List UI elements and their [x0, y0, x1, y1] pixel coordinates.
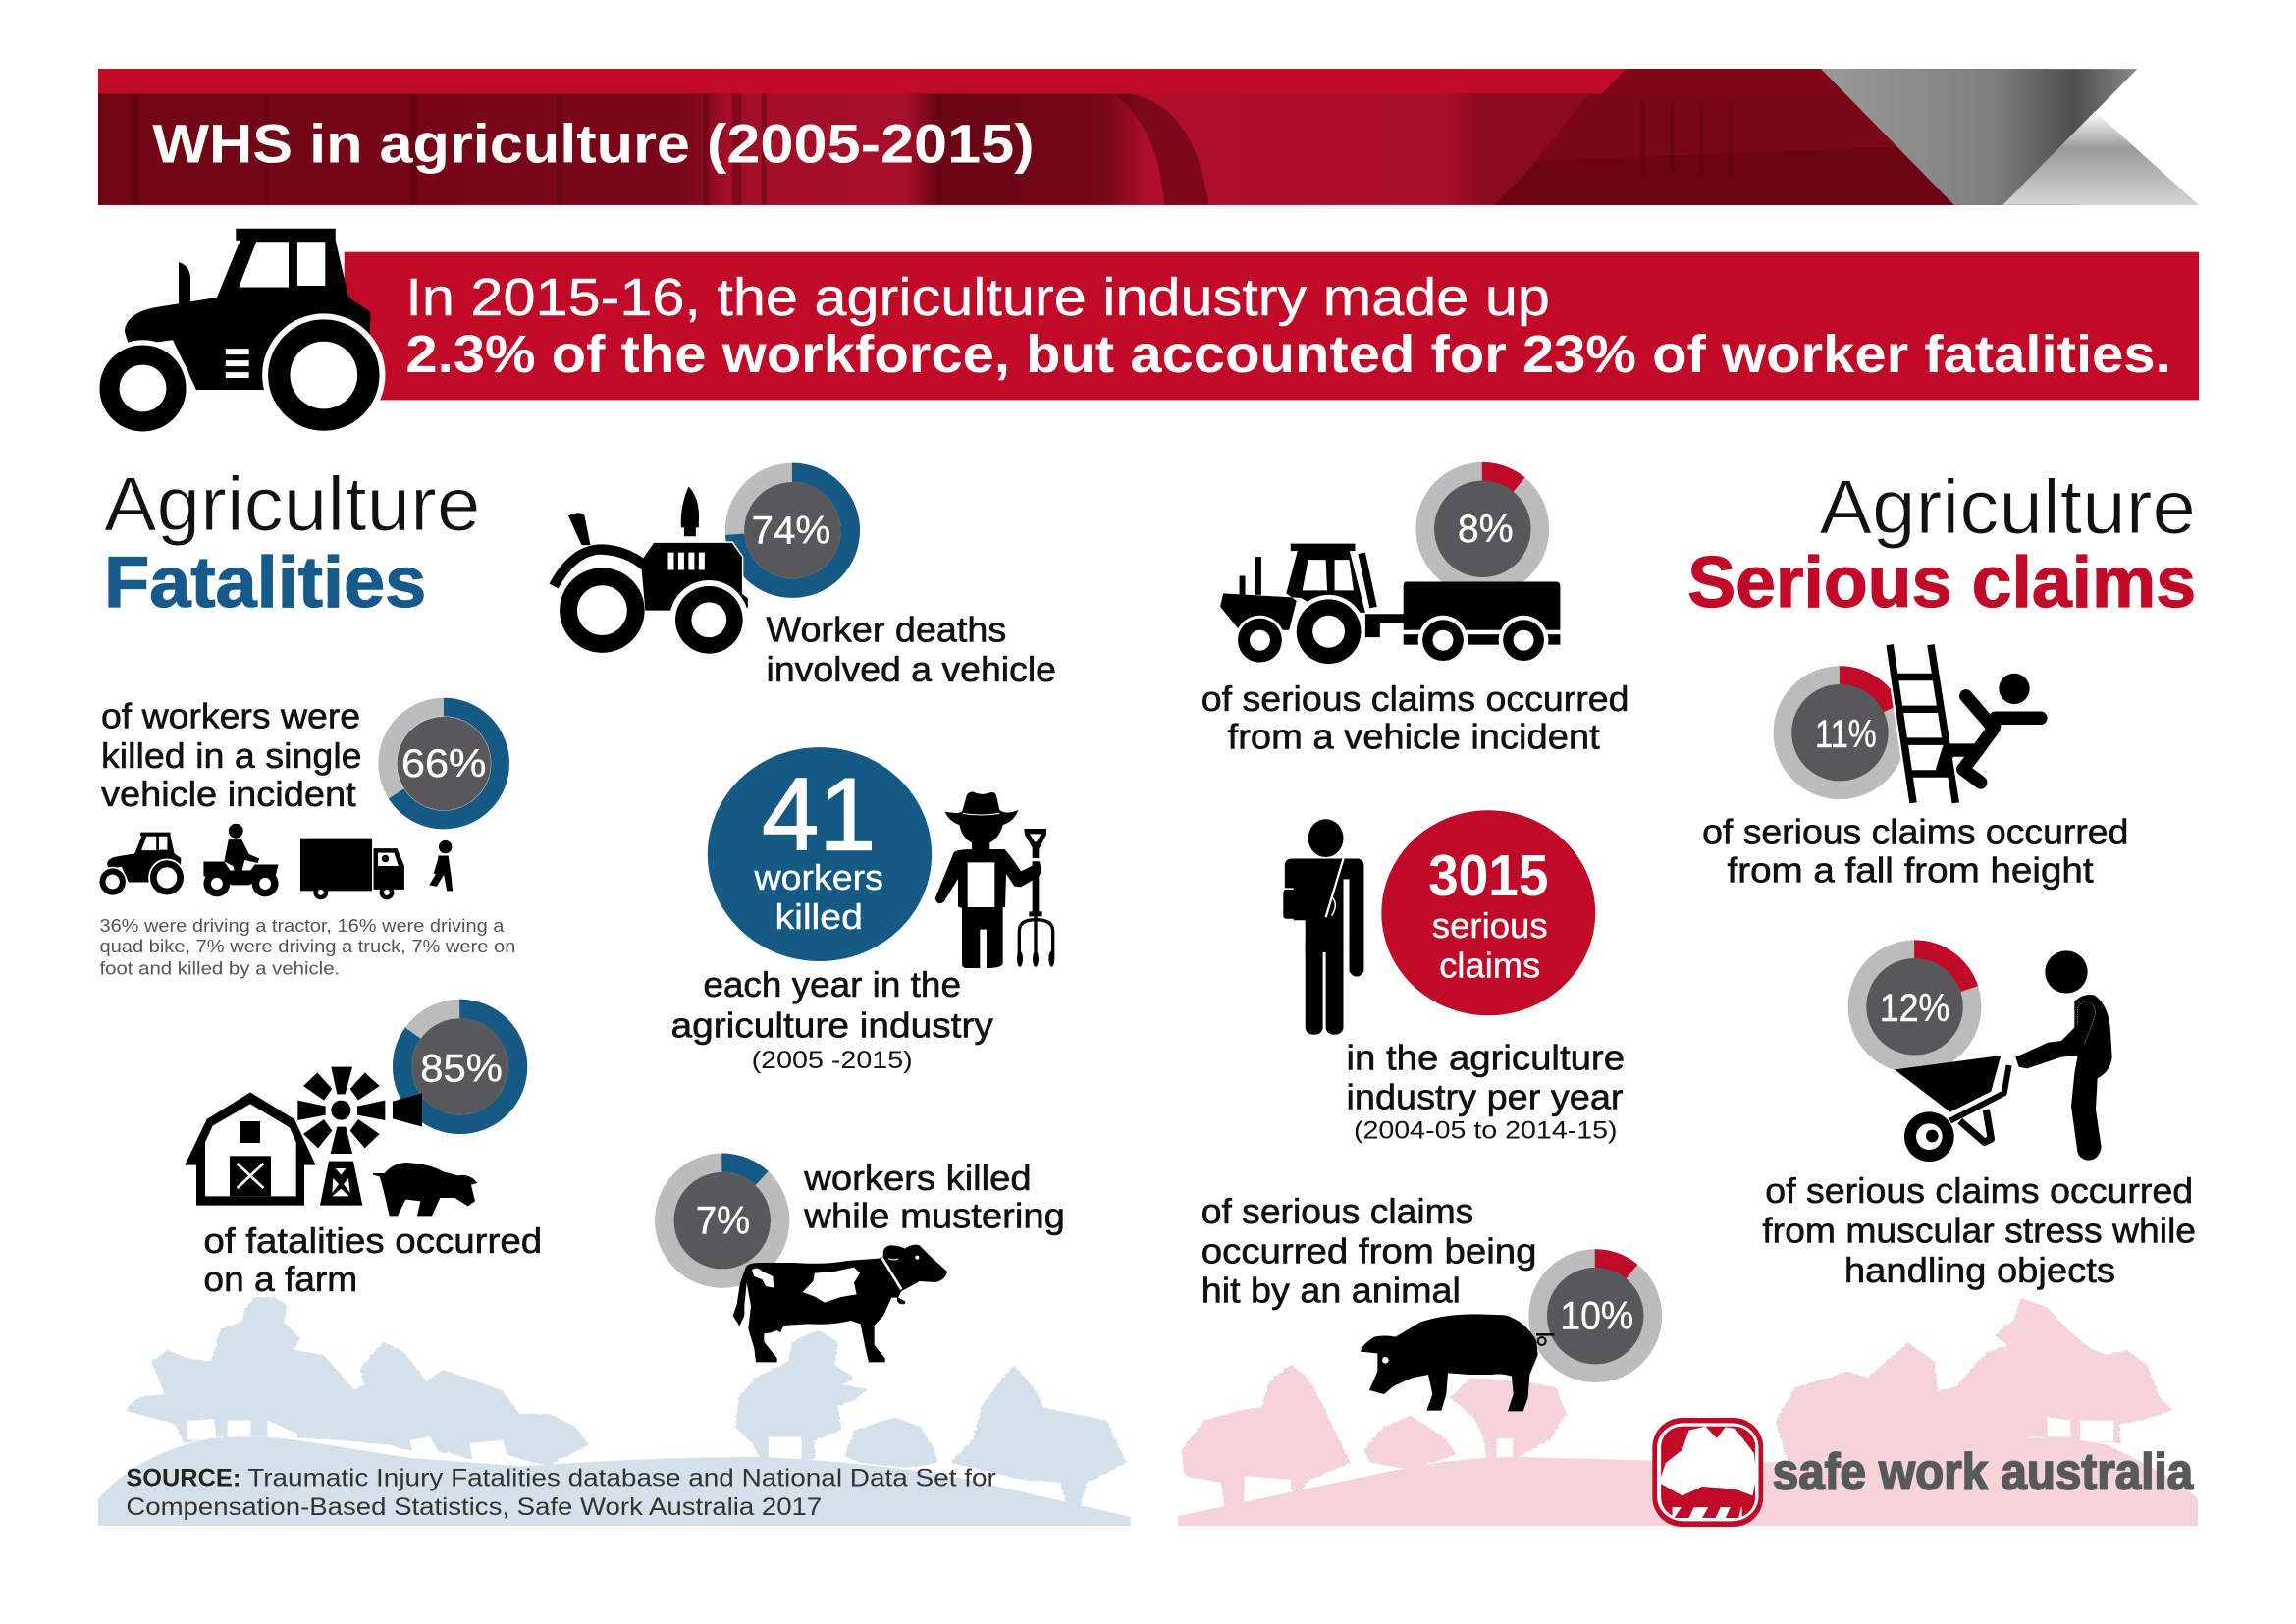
- text: single vehicle: [101, 697, 362, 814]
- source note: [126, 1464, 996, 1521]
- text: in the agriculture: (2004-05 to 2014-15): [1354, 1118, 1618, 1145]
- text: muscular stress: [1762, 1171, 2196, 1290]
- heading: agriculture: Agriculture: [1820, 465, 2196, 550]
- logo wordmark: safe work australia: [1773, 1443, 2194, 1500]
- stat: 66 percent: 66%: [401, 741, 486, 785]
- title: WHS in agriculture (2005-2015): [152, 114, 1035, 175]
- text: fall from height: [1702, 813, 2128, 890]
- text: hit by animal: hit by an animal: [1201, 1272, 1461, 1311]
- panel: agriculture fatalities: [98, 462, 2198, 1527]
- stat: 3015 serious claims: 3015: [1428, 842, 1548, 908]
- icon: cow: [733, 1245, 947, 1362]
- text: in the agriculture: industry per year: [1346, 1078, 1624, 1117]
- text: muscular stress: of serious claims occurred: [1765, 1171, 2193, 1211]
- source note: Compensation-Based Statistics, Safe Work Australia 2017: [126, 1493, 822, 1521]
- stat: 41 workers killed: workers: [754, 858, 883, 897]
- icon: pig: [1361, 1314, 1554, 1411]
- text: on a farm: of fatalities occurred: [203, 1221, 542, 1261]
- stat: 74 percent: [554, 472, 1056, 689]
- text: single vehicle: vehicle incident: [101, 775, 356, 814]
- key statistic banner: [345, 252, 2199, 400]
- stat: 3015 serious claims: [1283, 810, 1625, 1145]
- text: single vehicle: killed in a single: [101, 736, 362, 776]
- text: mustering: while mustering: [803, 1197, 1065, 1236]
- text: vehicle breakdown note: [99, 915, 515, 978]
- stat: 66 percent: [101, 697, 501, 820]
- stat: 11 percent fall: 11%: [1815, 712, 1877, 756]
- icon: quad bike: [203, 824, 279, 896]
- icon: person walking: [429, 840, 453, 891]
- icon: injured worker: [1283, 819, 1363, 1035]
- stat: 10 percent animal: 10%: [1560, 1294, 1633, 1338]
- stat: 12 percent muscular stress: [1762, 949, 2196, 1290]
- text: hit by animal: occurred from being: [1201, 1231, 1537, 1271]
- icon: worker with wheelbarrow: [1895, 950, 2112, 1162]
- stat: 8 percent: [1201, 472, 1629, 757]
- stat: 7 percent mustering: 7%: [696, 1199, 750, 1243]
- stat: 3015 serious claims: claims: [1439, 946, 1540, 985]
- text: vehicle incident: of serious claims occurred: [1201, 679, 1629, 719]
- header banner: [98, 68, 2202, 206]
- key statistic line 2: 2.3% of the workforce, but accounted for 23% of worker fatalities.: [405, 325, 2171, 384]
- icon: tractor and trailer: [1220, 544, 1560, 669]
- stat: 41 workers killed: killed: [774, 897, 863, 937]
- text: on a farm: on a farm: [203, 1260, 357, 1299]
- stat: 12 percent muscular stress: 12%: [1880, 986, 1949, 1030]
- text: in the agriculture: [1346, 1038, 1625, 1145]
- text: each year: [671, 965, 993, 1074]
- logo: safe work australia: [1652, 1418, 2194, 1527]
- text: each year: agriculture industry: [671, 1006, 993, 1046]
- text: hit by animal: [1201, 1192, 1537, 1311]
- source note: Traumatic Injury Fatalities database and National Data Set for: [247, 1464, 996, 1491]
- heading: serious claims: Serious claims: [1687, 543, 2196, 623]
- text: worker deaths: [767, 611, 1056, 689]
- text: vehicle incident: [1201, 679, 1629, 757]
- background: pink trees and hill: [1178, 1298, 2198, 1526]
- text: vehicle breakdown note: foot and killed by a vehicle.: [99, 957, 340, 978]
- stat: 85 percent: 85%: [420, 1046, 503, 1090]
- icon: truck: [300, 839, 404, 899]
- stat: 7 percent mustering: [665, 1159, 1065, 1362]
- icon: ladder fall: [1890, 645, 2041, 803]
- source note: SOURCE:: [126, 1464, 240, 1491]
- background: blue trees and hill: [98, 1297, 1131, 1526]
- icon: hero tractor: [94, 229, 385, 437]
- text: worker deaths: Worker deaths: [767, 611, 1006, 650]
- stat: 41 workers killed: [671, 747, 993, 1074]
- text: hit by animal: of serious claims: [1201, 1192, 1473, 1231]
- text: on a farm: [203, 1221, 542, 1299]
- icon: mini tractor: [98, 833, 186, 896]
- text: vehicle breakdown note: 36% were driving a tractor, 16% were driving a: [99, 915, 505, 936]
- stat: 10 percent animal: [1201, 1192, 1652, 1411]
- heading: agriculture: Agriculture: [104, 462, 480, 547]
- text: in the agriculture: in the agriculture: [1346, 1038, 1625, 1077]
- text: mustering: [803, 1159, 1065, 1236]
- key statistic line 1: In 2015-16, the agriculture industry made up: [405, 268, 1550, 327]
- stat: 74 percent: 74%: [752, 509, 830, 553]
- text: vehicle incident: from a vehicle incident: [1228, 718, 1600, 757]
- icon: barn, windmill and pig: [185, 1067, 478, 1216]
- heading: fatalities: Fatalities: [104, 543, 426, 623]
- text: muscular stress: from muscular stress while: [1762, 1212, 2196, 1251]
- stat: 11 percent fall: [1702, 645, 2128, 890]
- text: each year: (2005 -2015): [752, 1048, 913, 1074]
- logo mark: [1652, 1418, 1763, 1527]
- text: vehicle breakdown note: quad bike, 7% were driving a truck, 7% were on: [99, 936, 515, 956]
- stat: 41 workers killed: 41: [762, 758, 876, 873]
- text: fall from height: of serious claims occurred: [1702, 813, 2128, 852]
- text: mustering: workers killed: [803, 1159, 1032, 1198]
- icon: farmer with pitchfork: [935, 792, 1054, 968]
- text: single vehicle: of workers were: [101, 697, 360, 736]
- stat: 85 percent: [185, 1009, 542, 1299]
- stat: 8 percent: 8%: [1458, 507, 1514, 551]
- panel: agriculture serious claims: [1178, 465, 2198, 1527]
- icon: tractor: [554, 486, 749, 660]
- text: each year: each year in the: [703, 965, 961, 1004]
- text: muscular stress: handling objects: [1844, 1251, 2115, 1290]
- text: worker deaths: involved a vehicle: [767, 650, 1056, 689]
- text: fall from height: from a fall from height: [1728, 850, 2094, 890]
- stat: 3015 serious claims: serious: [1432, 906, 1548, 946]
